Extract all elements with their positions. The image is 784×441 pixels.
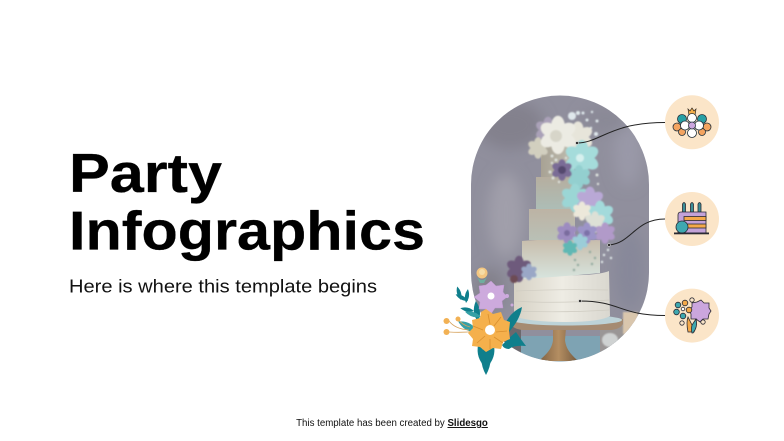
white roses top (536, 116, 552, 139)
footer credit: This template has been created by Slidesgo (296, 418, 488, 429)
tier 1 (541, 146, 570, 177)
decorative floral bouquet (444, 268, 526, 375)
tier 5 (514, 271, 610, 322)
middle cluster (562, 184, 586, 212)
icon: birthday cake badge (665, 192, 719, 246)
sprig dots top (568, 111, 598, 136)
connector: bottom tier to icon (578, 300, 665, 316)
subtitle: Here is where this template begins (69, 276, 377, 296)
table (520, 336, 625, 362)
stand stem (540, 330, 577, 361)
tier 4 (522, 240, 600, 279)
tier 2 (536, 177, 574, 209)
photo: wedding cake in pill frame (471, 95, 649, 362)
left purple cluster (505, 256, 533, 282)
icon: party flowers badge (665, 289, 719, 343)
small lilac dots (505, 294, 509, 298)
yellow buds on stems (449, 319, 477, 332)
falling sprigs (573, 251, 596, 271)
connector: top cake flower to icon (576, 122, 665, 144)
white blossom bottom right (602, 333, 618, 347)
stand plate (511, 319, 623, 330)
tier 3 (529, 209, 575, 240)
icon: flower arrangement badge (665, 95, 719, 149)
title (69, 142, 425, 262)
title: Party (69, 142, 222, 204)
bottom teal leaf (475, 307, 526, 375)
flower spray (505, 111, 616, 283)
yellow bud (477, 277, 487, 283)
purple flower (551, 159, 573, 181)
title: Infographics (69, 200, 425, 262)
aqua flowers (565, 140, 599, 170)
orange flower (468, 309, 510, 352)
connector: middle tier to icon (608, 219, 665, 246)
white sprays (548, 154, 599, 185)
teal leaves (455, 286, 481, 322)
lilac flower (474, 281, 507, 314)
candle (623, 312, 638, 334)
